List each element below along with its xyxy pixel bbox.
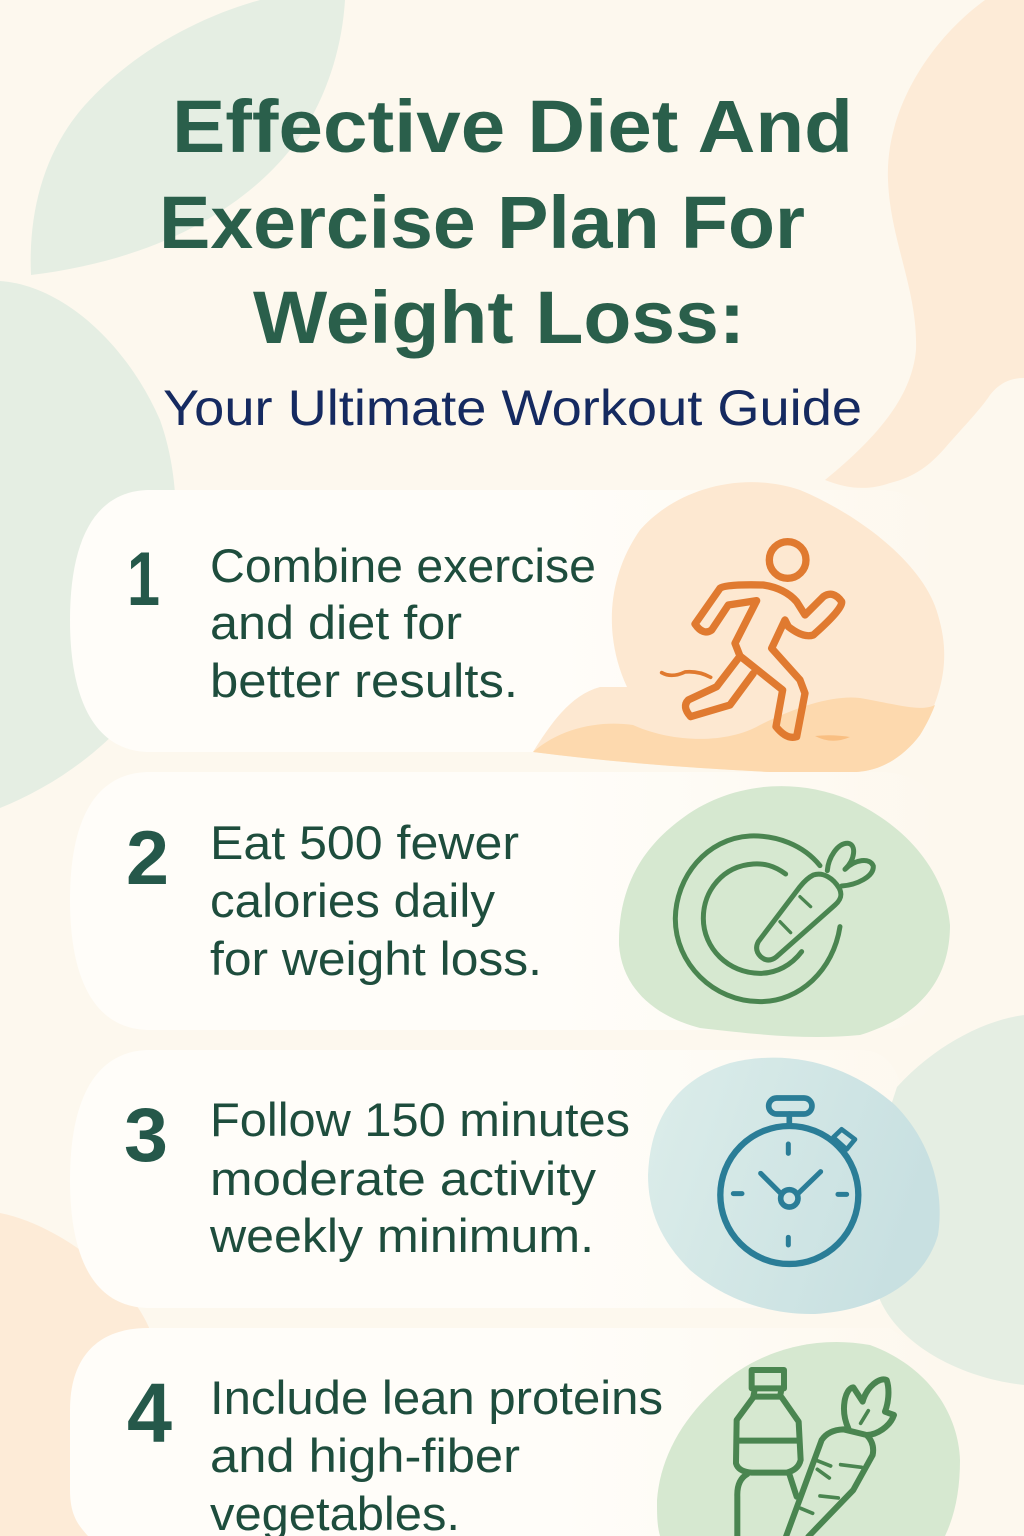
step 1 text xyxy=(210,539,596,707)
step 4 text: Include lean proteins xyxy=(210,1371,663,1424)
title: Effective Diet And xyxy=(172,85,853,168)
icon: plate with carrot on green blob xyxy=(619,786,950,1037)
subtitle: Your Ultimate Workout Guide xyxy=(163,380,862,436)
panel: step 3 xyxy=(70,1015,1024,1385)
title: Weight Loss: xyxy=(253,276,745,359)
step 1 text: better results. xyxy=(210,654,518,707)
step 1 number: 1 xyxy=(127,537,160,622)
step 3 text: Follow 150 minutes xyxy=(210,1093,630,1146)
step 2 text xyxy=(210,816,542,985)
step 1 text: Combine exercise xyxy=(210,539,596,592)
step 4 text xyxy=(210,1371,663,1536)
step 2 text: calories daily xyxy=(210,874,496,927)
title xyxy=(159,85,853,359)
step 4 number: 4 xyxy=(127,1366,172,1460)
step 2 number: 2 xyxy=(126,816,169,901)
step 3 text: moderate activity xyxy=(210,1152,597,1205)
panel: step 4 xyxy=(70,1328,965,1536)
title: Exercise Plan For xyxy=(159,181,805,264)
step 2 text: for weight loss. xyxy=(210,932,542,985)
step 1 text: and diet for xyxy=(210,596,462,649)
step 3 text xyxy=(209,1093,630,1262)
panel: step 1 xyxy=(70,482,960,774)
icon: water bottle and carrot on green blob xyxy=(657,1342,960,1536)
icon: stopwatch on blue blob xyxy=(648,1058,940,1314)
step 2 text: Eat 500 fewer xyxy=(210,816,519,869)
step 3 text: weekly minimum. xyxy=(209,1209,594,1262)
step 4 text: and high-fiber xyxy=(210,1429,520,1482)
panel: step 2 xyxy=(70,772,960,1037)
step 3 number: 3 xyxy=(124,1093,168,1178)
background blob: right green xyxy=(860,1015,1024,1385)
icon: runner on peach blob xyxy=(533,482,944,774)
